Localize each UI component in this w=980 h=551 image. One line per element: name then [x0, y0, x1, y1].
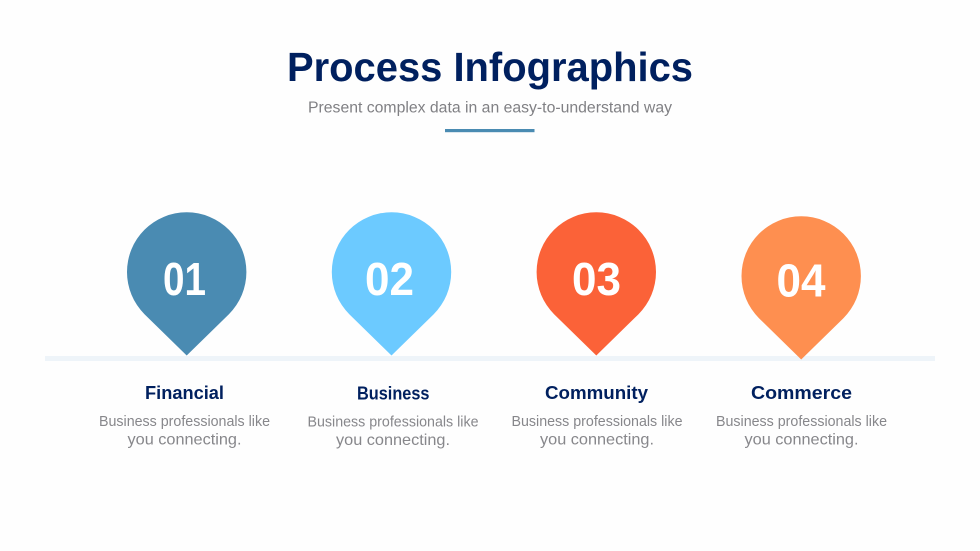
number 01: 01 [163, 253, 206, 305]
icon: pin 01 [127, 212, 246, 356]
heading: Community: Community [545, 382, 649, 403]
step 1: Financial [99, 212, 270, 448]
number 04: 04 [776, 254, 826, 306]
text: Commerce description: Business professionals like [716, 413, 887, 430]
step 4: Commerce [716, 216, 887, 448]
number 03: 03 [572, 253, 621, 305]
icon: pin 02 [332, 212, 451, 356]
text: Commerce description: you connecting. [744, 432, 858, 448]
step 2: Business [308, 212, 478, 449]
heading: Commerce: Commerce [751, 382, 852, 403]
number 02: 02 [365, 253, 414, 305]
title underline [445, 129, 534, 132]
text: Community description: Business professionals like [512, 413, 682, 430]
heading: Financial: Financial [145, 382, 224, 403]
text: Community description [512, 413, 682, 448]
text: Business description: Business professionals like [308, 414, 478, 430]
text: Financial description: Business professionals like [99, 413, 270, 430]
text: Business description [308, 414, 478, 449]
title: Process Infographics [287, 44, 693, 90]
text: Community description: you connecting. [540, 432, 654, 448]
text: Commerce description [716, 413, 887, 448]
step 3: Community [512, 212, 682, 448]
text: Financial description [99, 413, 270, 448]
icon: pin 04 [742, 216, 861, 360]
text: Financial description: you connecting. [128, 432, 242, 448]
subtitle: Present complex data in an easy-to-understand way [308, 100, 672, 116]
text: Business description: you connecting. [336, 432, 450, 449]
timeline bar [45, 356, 935, 361]
heading: Business: Business [357, 382, 430, 404]
icon: pin 03 [537, 212, 656, 356]
